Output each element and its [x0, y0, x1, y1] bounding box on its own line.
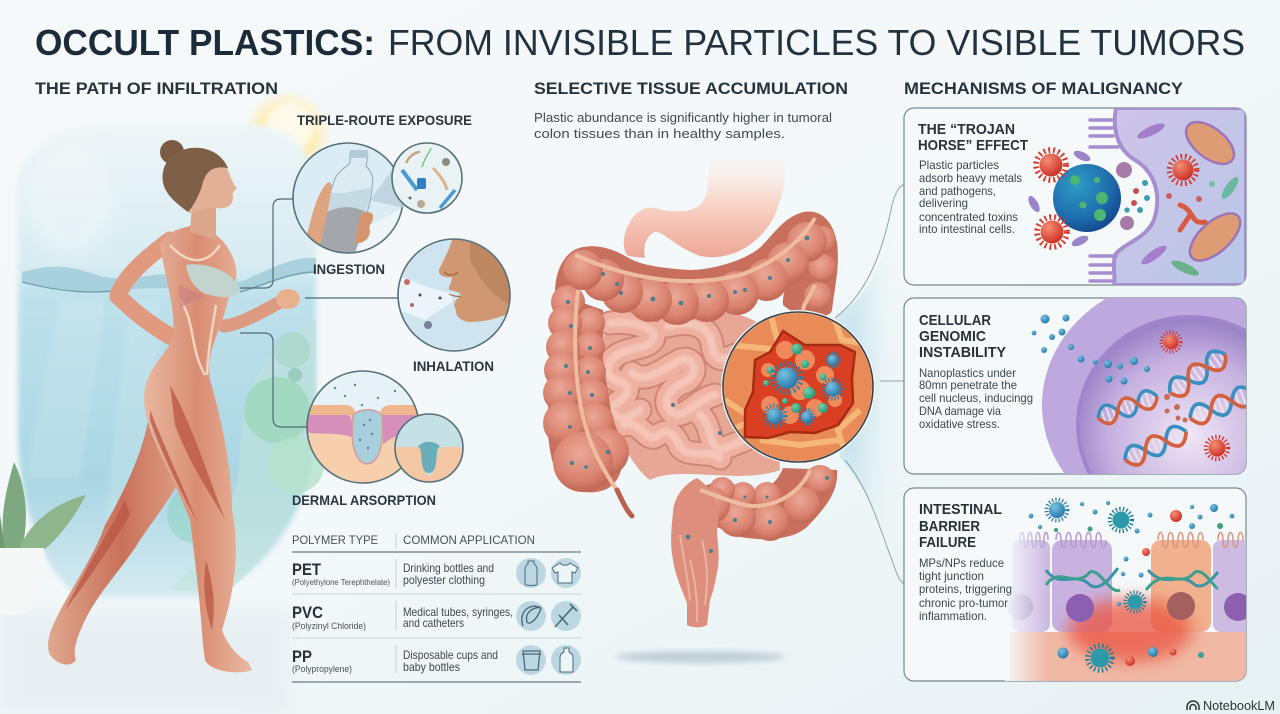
dna strands: [1096, 349, 1246, 467]
panel body text: 80mn penetrate the: [919, 378, 1017, 392]
row: PP: baby bottles: [403, 660, 460, 674]
magnifier beam: [370, 162, 404, 208]
bra: [186, 264, 240, 297]
dna fragments: [1164, 394, 1188, 422]
row: PET: Drinking bottles and: [403, 561, 494, 575]
microvilli: [1020, 532, 1106, 548]
inflammation glow: [1068, 598, 1192, 662]
row: PVC: [292, 601, 581, 631]
panel body text: oxidative stress.: [919, 417, 1000, 431]
label: dermal absorption: DERMAL ARSORPTION: [292, 492, 436, 508]
text: selective accumulation description: [534, 111, 832, 141]
panel body text: into intestinal cells.: [919, 222, 1015, 236]
green cells: [167, 320, 324, 590]
particles in lumen: [1029, 501, 1234, 606]
panel body text: MPs/NPs reduce: [919, 556, 1004, 570]
floor tint: [0, 610, 290, 714]
panel body text: [919, 158, 1022, 236]
sun glow: [243, 90, 331, 178]
right epithelial cells: [1151, 540, 1253, 632]
microplastics circle: [392, 143, 462, 213]
icon: dermal absorption skin: [305, 371, 465, 490]
light rays: [25, 300, 160, 520]
illustration: runner in water window: [18, 90, 331, 672]
cell membrane and cytoplasm: [1114, 108, 1246, 285]
abdomen muscles: [170, 245, 220, 375]
cell with nucleus: [1042, 298, 1246, 474]
panel body text: Nanoplastics under: [919, 366, 1016, 380]
skin pore detail: [395, 414, 465, 485]
icon: ingestion bottle with microplastics: [293, 143, 462, 260]
torso and front leg: [144, 222, 252, 672]
ground shadow: [615, 651, 785, 663]
table header: [292, 533, 535, 547]
plastic particle: [1053, 164, 1121, 232]
water surface: [22, 258, 316, 292]
panel body text: proteins, triggering: [919, 582, 1012, 596]
tumor particles: [763, 344, 843, 426]
nanoplastics: [1032, 314, 1150, 384]
taenia bands: [575, 218, 815, 506]
row: PP: Disposable cups and: [403, 648, 498, 662]
panel body text: [919, 556, 1012, 623]
icon: inhalation nose: [398, 236, 512, 351]
panel body text: adsorb heavy metals: [919, 171, 1022, 185]
left fade overlay: [1005, 530, 1047, 682]
row: PET: [292, 558, 581, 588]
stomach: [624, 160, 784, 258]
nuclei: [1007, 592, 1252, 622]
microbes in cell: [1136, 121, 1241, 278]
panel: cellular genomic instability: [903, 297, 1247, 475]
panel: intestinal barrier failure: [904, 488, 1253, 682]
transverse colon: [563, 222, 836, 325]
hair bun: [160, 140, 184, 164]
hair: [163, 148, 228, 212]
text: selective accumulation description: Plastic abundance is significantly higher in tumoral: [534, 111, 832, 125]
panel body text: concentrated toxins: [919, 210, 1018, 224]
panel heading: GENOMIC: [919, 328, 986, 345]
panel heading: THE “TROJAN: [918, 121, 1015, 138]
panel heading: [919, 501, 1002, 551]
heading: mechanisms of malignancy: MECHANISMS OF MALIGNANCY: [904, 79, 1184, 98]
mitochondria: [1184, 120, 1242, 262]
panel: trojan horse effect: [904, 108, 1248, 285]
row: PP: (Polypropylene): [292, 664, 352, 674]
thigh muscles: [65, 385, 225, 630]
title: OCCULT PLASTICS:: [35, 22, 375, 63]
row: PET: (Polyethylone Terephthelate): [292, 578, 390, 587]
panel heading: BARRIER: [919, 518, 980, 535]
row: PVC: and catheters: [403, 616, 464, 630]
back leg: [48, 400, 195, 665]
appendix: [617, 490, 632, 516]
illustration: digestive tract: [543, 160, 876, 663]
heading: selective tissue accumulation: SELECTIVE TISSUE ACCUMULATION: [534, 79, 848, 98]
front arm: [224, 300, 284, 326]
heading: the path of infiltration: THE PATH OF INFILTRATION: [35, 79, 278, 98]
pathogens: [1026, 149, 1134, 248]
embedded plastic particles: [564, 236, 829, 553]
tight junction strands: [1046, 568, 1218, 591]
label: ingestion: INGESTION: [313, 261, 385, 277]
icon: potted plant: [0, 462, 86, 615]
small intestine loops: [608, 322, 745, 458]
table header: POLYMER TYPE: [292, 533, 378, 547]
red oxidative species: [1161, 332, 1228, 459]
row: PVC: (Polyzinyl Chloride): [292, 621, 366, 631]
panel body text: DNA damage via: [919, 404, 1001, 418]
magnified tumor: [720, 310, 876, 470]
table header: COMMON APPLICATION: [403, 533, 535, 547]
text: selective accumulation description: colon tissues than in healthy samples.: [534, 127, 785, 141]
small intestine mass: [602, 305, 780, 480]
panel body text: cell nucleus, inducingg: [919, 391, 1033, 405]
panel body text: and pathogens,: [919, 184, 996, 198]
row: PVC: Medical tubes, syringes,: [403, 605, 513, 619]
panel body text: inflammation.: [919, 609, 987, 623]
panel heading: CELLULAR: [919, 312, 991, 329]
panel body text: delivering: [919, 196, 968, 210]
row: PVC: PVC: [292, 603, 323, 622]
title: FROM INVISIBLE PARTICLES TO VISIBLE TUMORS: [388, 22, 1245, 63]
rectum: [671, 478, 719, 627]
panel body text: [919, 366, 1033, 431]
back arm: [118, 240, 190, 346]
left epithelial cells: [1012, 540, 1112, 632]
front fist: [276, 289, 300, 309]
colon back layer: [548, 212, 838, 539]
row: PP: [292, 645, 581, 675]
row: PET: PET: [292, 560, 322, 579]
heading: triple-route exposure: TRIPLE-ROUTE EXPOSURE: [297, 112, 472, 128]
row: PP: PP: [292, 647, 312, 666]
panel body text: chronic pro-tumor: [919, 596, 1008, 610]
head: [166, 148, 237, 213]
logo: NotebookLM: NotebookLM: [1203, 698, 1275, 713]
table: polymer types: [292, 533, 581, 682]
water window: [18, 125, 316, 598]
ascending colon: [543, 285, 629, 492]
panel heading: HORSE” EFFECT: [918, 137, 1028, 154]
panel heading: INTESTINAL: [919, 501, 1002, 518]
sky haze: [25, 145, 115, 255]
callout halo connecting magnifier to panels: [835, 184, 906, 585]
panel body text: Plastic particles: [919, 158, 999, 172]
neck: [190, 205, 216, 240]
panel heading: INSTABILITY: [919, 344, 1006, 361]
row: PET: polyester clothing: [403, 573, 485, 587]
connector lines: [240, 199, 398, 427]
microvilli: [1090, 120, 1118, 281]
rib muscles: [178, 285, 205, 308]
label: inhalation: INHALATION: [413, 358, 494, 374]
panel heading: [919, 312, 1006, 361]
panel body text: tight junction: [919, 569, 984, 583]
panel heading: FAILURE: [919, 534, 976, 551]
lower tissue: [1010, 632, 1246, 681]
panel heading: [918, 121, 1028, 154]
sigmoid colon: [694, 465, 835, 541]
